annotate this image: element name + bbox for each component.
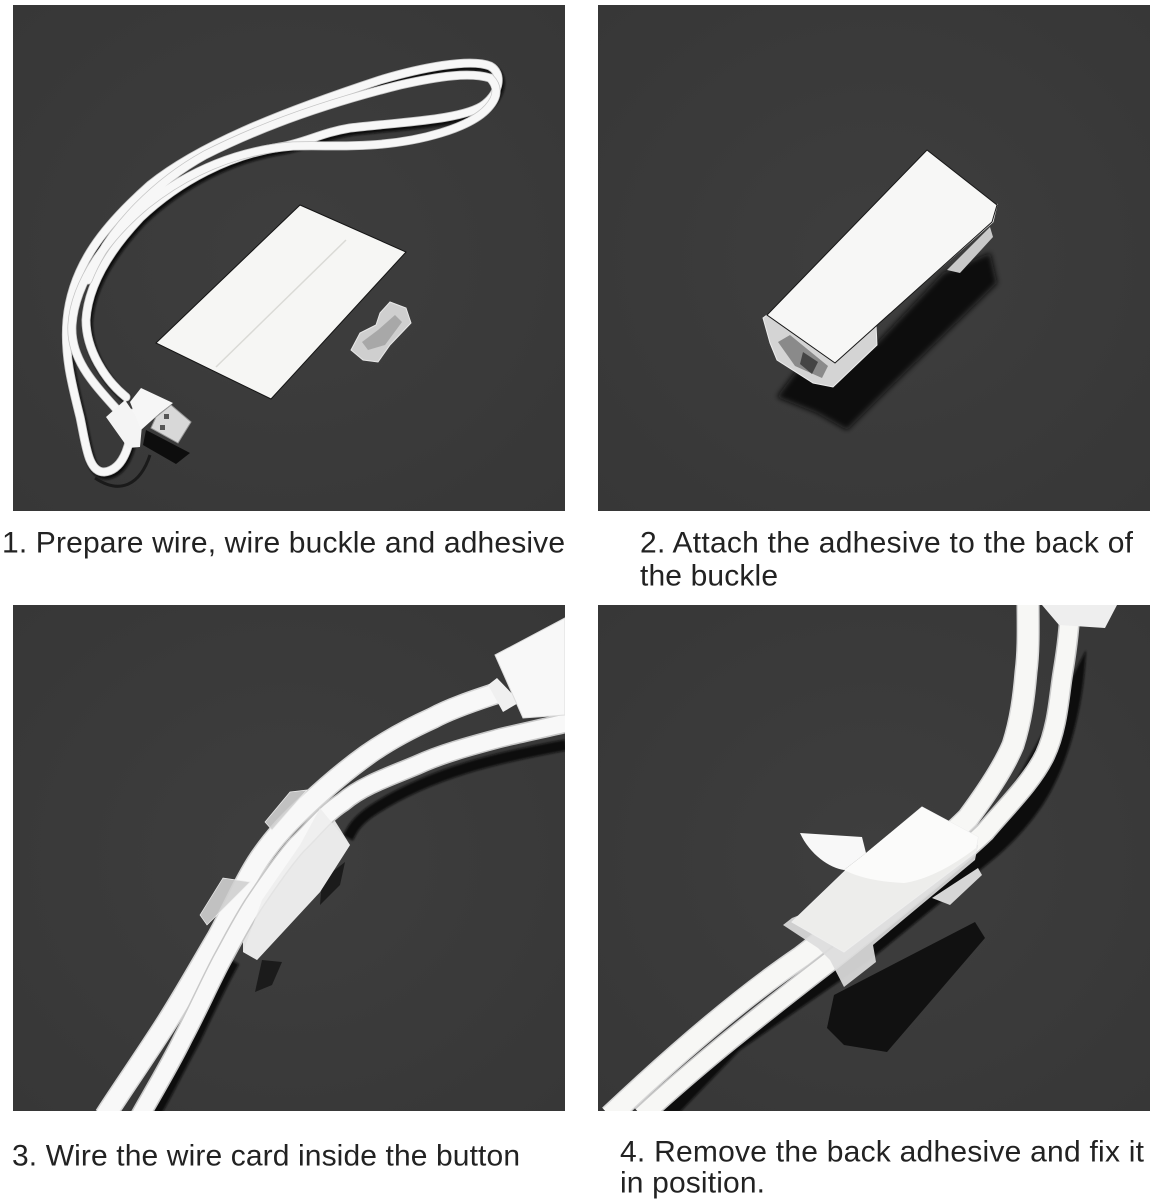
clear buckle wing [947,227,993,273]
panel: step 4 photo [598,600,1150,1116]
label: step 3 caption: 3. Wire the wire card inside the button [12,1140,520,1172]
label: step 4 caption [620,1136,1145,1200]
adhesive strip [156,205,406,399]
adhesive on buckle [767,150,997,363]
clear buckle [351,302,411,362]
panel: step 1 photo [13,5,565,511]
cables [610,600,1070,1116]
clips on cable [200,790,350,960]
cable shadows [155,745,566,1116]
label: step 2 caption [640,526,1134,592]
label: step 2 caption: the buckle [640,560,778,592]
cable shadows [650,650,1086,1112]
clear buckle body [763,205,997,387]
USB plug [106,388,191,464]
label: step 2 caption: 2. Attach the adhesive to the back of [640,526,1134,560]
label: step 4 caption: 4. Remove the back adhesive and fix it [620,1136,1145,1168]
clip body behind cables [243,808,350,960]
panel: step 2 photo [598,5,1150,511]
cables [105,692,570,1116]
cable shadows [68,66,500,475]
adhesive backing and peeled tab [792,807,978,952]
connector block [488,618,565,718]
white cable loops [66,63,498,472]
reflections of clips [320,862,345,905]
clear clip [783,845,982,987]
label: step 4 caption: in position. [620,1166,765,1200]
label: step 1 caption: 1. Prepare wire, wire buckle and adhesive [2,526,565,560]
buckle reflection [777,253,997,430]
connector [1042,605,1117,628]
panel: step 3 photo [13,605,570,1116]
